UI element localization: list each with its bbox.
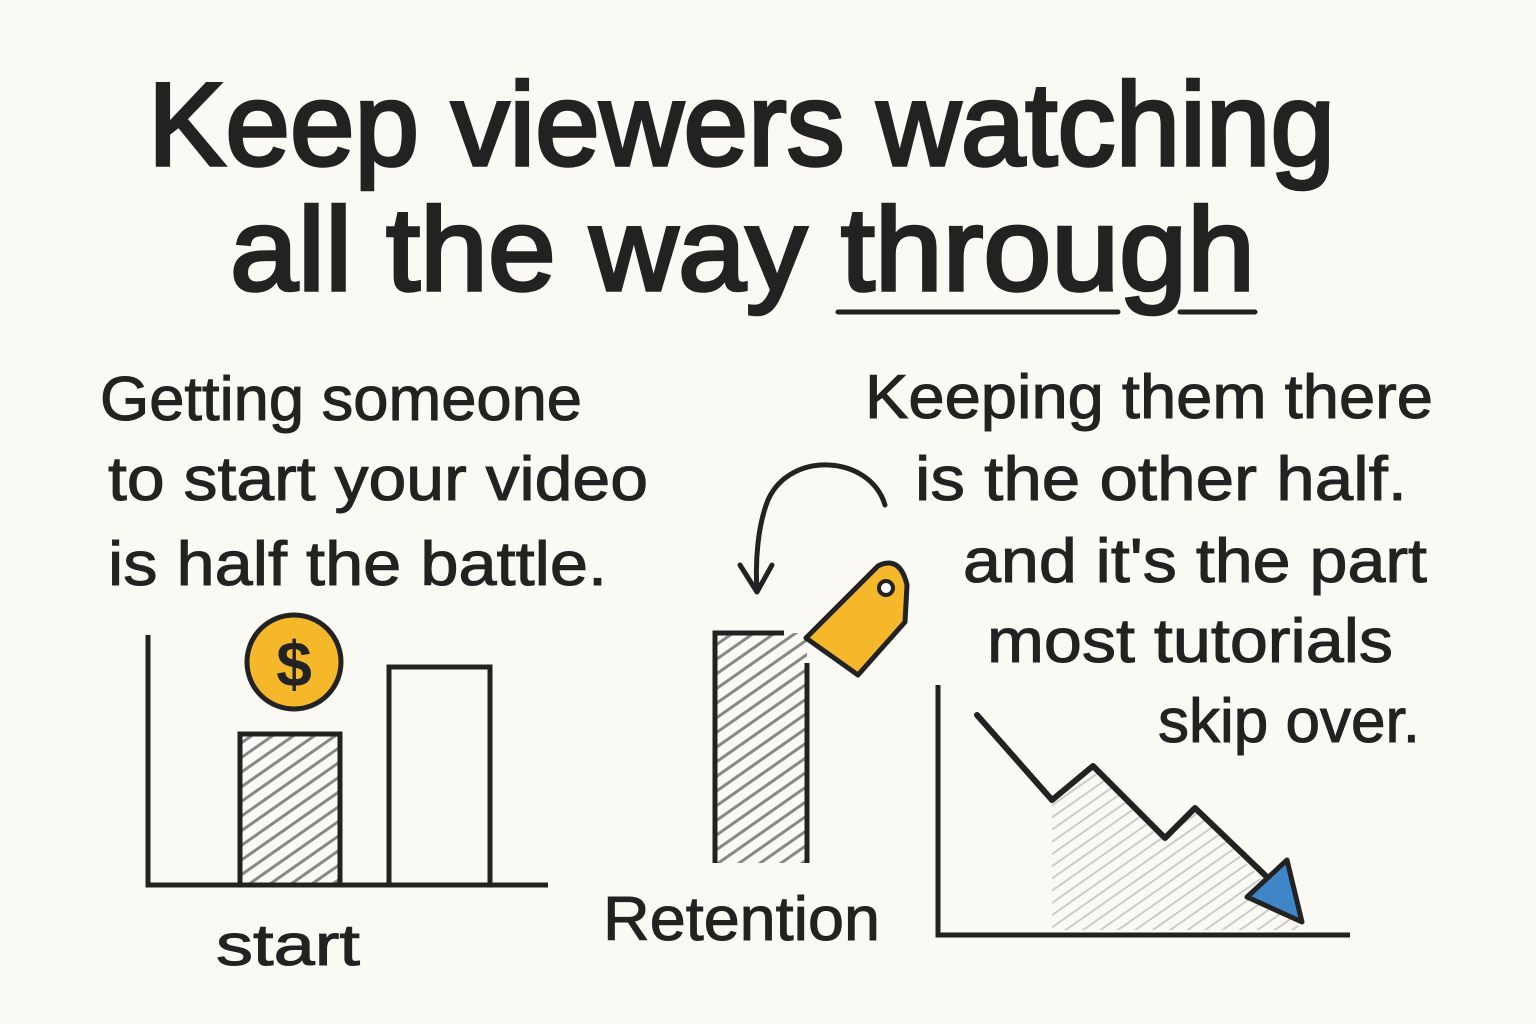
text block: left [100,365,648,599]
title: Keep viewers watching [148,59,1335,191]
title: all the way through [230,184,1255,316]
line chart: decline [938,685,1350,935]
icon: coin [247,615,341,709]
bar chart: start: start [216,913,360,978]
text block: right: and it's the part [963,527,1427,596]
text block: right [865,363,1433,756]
text block: right: skip over. [1158,687,1420,756]
retention bar: Retention [603,885,880,954]
text block: right: is the other half. [915,445,1407,514]
bar chart: start [148,615,548,978]
retention bar [603,633,880,954]
text block: right: most tutorials [987,607,1393,676]
arrow: curved [740,465,885,592]
icon: blue arrowhead [1247,860,1302,922]
icon: coin: $ [276,628,312,700]
title [148,59,1335,316]
text block: left: to start your video [108,445,648,514]
text block: right: Keeping them there [865,363,1433,432]
text block: left: Getting someone [100,365,582,434]
icon: yellow tag [806,563,907,675]
text block: left: is half the battle. [108,530,607,599]
